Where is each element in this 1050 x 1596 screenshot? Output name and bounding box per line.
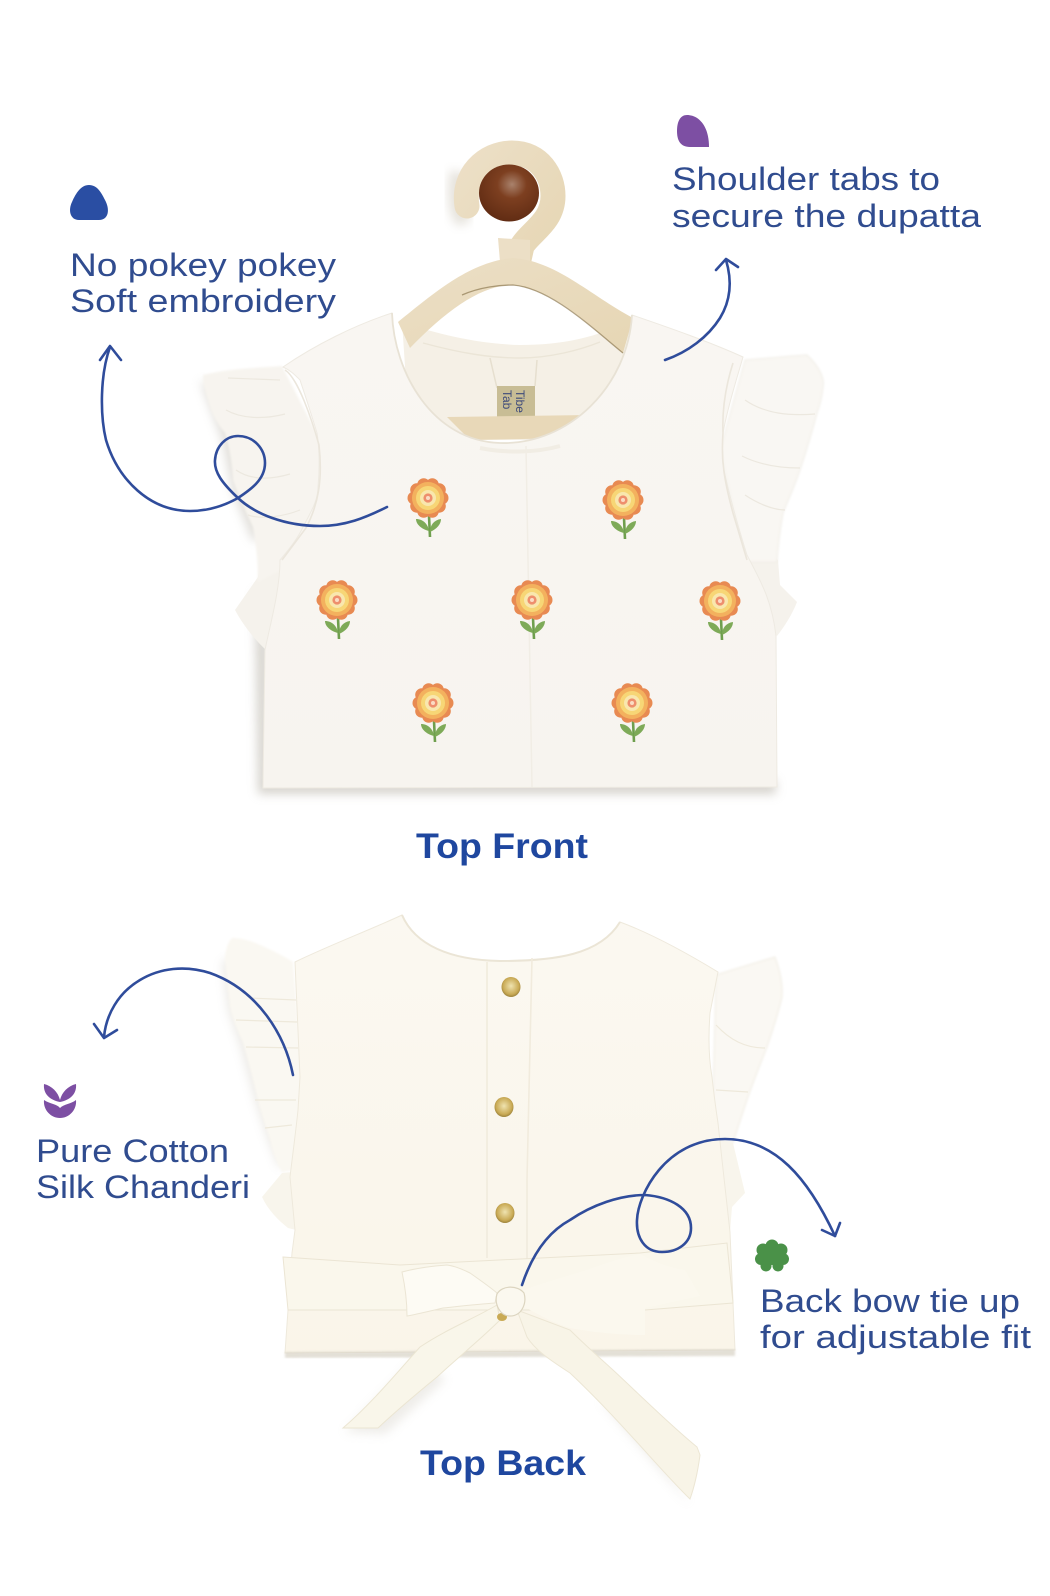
note icon: blue rounded triangle — [70, 185, 108, 220]
front body panel — [263, 313, 777, 788]
bow tail shadow — [345, 1355, 690, 1505]
text: no pokey pokey soft embroidery — [70, 247, 336, 319]
bow right loop — [520, 1254, 700, 1335]
bow left tail — [343, 1305, 500, 1428]
gold button — [494, 1097, 514, 1117]
garment photo: top back — [222, 915, 782, 1505]
arrow: shoulder tabs callout — [665, 259, 738, 360]
caption: top front: Top Front — [416, 827, 588, 866]
garment photo: top front on hanger — [200, 153, 823, 794]
text: pure cotton silk chanderi: Silk Chanderi — [36, 1169, 250, 1205]
note icon: green clover — [755, 1240, 789, 1272]
waist belt — [283, 1243, 733, 1310]
caption: top back: Top Back — [420, 1444, 587, 1483]
back body panel — [285, 915, 735, 1353]
right ruffle — [712, 957, 782, 1143]
hanger arms — [398, 258, 633, 353]
note icon: purple drop — [677, 115, 709, 147]
left lower flap — [235, 540, 310, 650]
neck binding — [402, 915, 620, 961]
left ruffle — [203, 366, 320, 582]
arrow: cotton chanderi callout — [94, 969, 293, 1075]
lower side flaps — [262, 1140, 745, 1232]
text: back bow tie up for adjustable fit — [760, 1283, 1031, 1355]
text: back bow tie up for adjustable fit: Back bow tie up — [760, 1283, 1020, 1319]
neck inside — [402, 318, 632, 440]
small hidden button — [497, 1313, 507, 1321]
note icon: purple leaf pair — [44, 1084, 76, 1118]
bow right tail — [517, 1310, 700, 1499]
arrow: bow tie callout — [522, 1139, 840, 1285]
embroidered flower — [316, 580, 358, 639]
embroidered flower — [512, 580, 552, 639]
garment label: Tibe — [513, 390, 527, 413]
embroidered flower — [612, 683, 652, 742]
neckline binding — [392, 313, 632, 443]
text: back bow tie up for adjustable fit: for adjustable fit — [760, 1319, 1031, 1355]
button placket — [487, 958, 532, 1262]
embroidered flower — [412, 683, 454, 742]
text: no pokey pokey soft embroidery: No pokey pokey — [70, 247, 336, 283]
embroidered flower — [602, 480, 644, 539]
ruffle shadow — [222, 960, 290, 1170]
right ruffle — [720, 355, 823, 562]
bow knot — [496, 1287, 525, 1316]
left ruffle — [225, 938, 302, 1172]
wooden knob — [479, 164, 539, 222]
text: no pokey pokey soft embroidery: Soft embroidery — [70, 283, 336, 319]
text: pure cotton silk chanderi: Pure Cotton — [36, 1133, 229, 1169]
garment shadow — [255, 590, 776, 794]
gold button — [496, 1203, 514, 1223]
gold button — [502, 977, 520, 997]
right lower flap — [745, 530, 797, 636]
garment label: Tab — [500, 390, 514, 410]
hanger lower bar — [447, 415, 590, 440]
hanger hook — [466, 153, 553, 264]
hanger shadow — [448, 170, 470, 226]
embroidered flower — [700, 581, 740, 640]
hem shadow — [285, 1349, 735, 1358]
text: shoulder tabs to secure the dupatta — [672, 161, 981, 234]
arrow: embroidery callout — [100, 346, 387, 526]
garment label — [497, 386, 535, 418]
embroidered flower — [408, 478, 448, 537]
text: shoulder tabs to secure the dupatta: secure the dupatta — [672, 198, 981, 234]
text: pure cotton silk chanderi — [36, 1133, 250, 1205]
bow left loop — [402, 1265, 497, 1316]
text: shoulder tabs to secure the dupatta: Shoulder tabs to — [672, 161, 940, 197]
